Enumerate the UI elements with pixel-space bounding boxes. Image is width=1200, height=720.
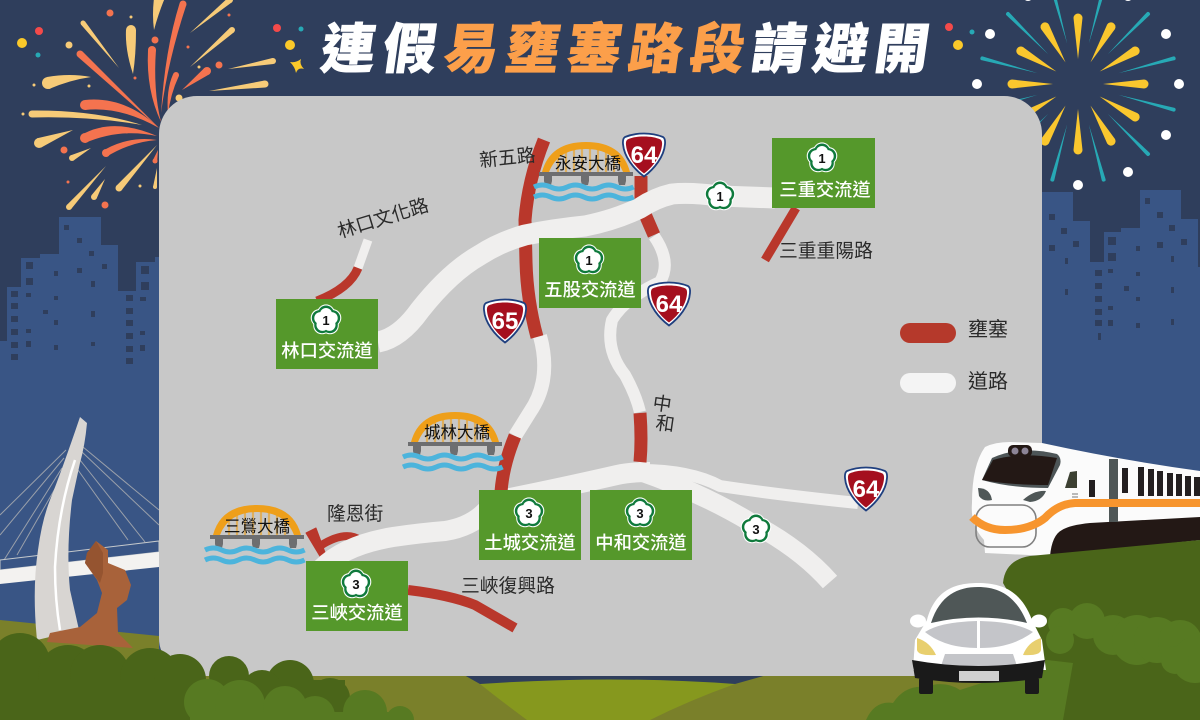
left cable bridge with tower <box>0 417 159 640</box>
sign: tucheng <box>479 490 581 560</box>
title sparkles <box>273 23 974 73</box>
legend <box>900 318 1008 393</box>
bridge: chenglin <box>403 412 503 469</box>
ground <box>0 620 1200 720</box>
title: 連假易壅塞路段請避開 <box>317 20 933 80</box>
left firework <box>17 0 276 210</box>
route shield 65 <box>484 300 526 342</box>
right city skyline <box>1040 190 1200 720</box>
legend: 壅塞 <box>968 318 1008 341</box>
congestion: linkou culture road <box>317 268 358 301</box>
bridge: yongan <box>534 142 634 199</box>
map panel <box>159 96 1042 676</box>
road: freeway 1 main <box>378 193 775 342</box>
sign: sanxia <box>306 561 408 631</box>
road labels: 隆恩街 <box>327 503 384 524</box>
sign: zhonghe <box>590 490 692 560</box>
freeway marker 3 <box>741 513 771 543</box>
road map <box>306 140 858 628</box>
sign: linkou: 林口交流道 <box>281 340 373 361</box>
route shield 64 middle: 64 <box>656 291 683 318</box>
congestion: sanxia fuxing road <box>408 590 515 628</box>
legend: 道路 <box>968 370 1008 393</box>
road labels: 林口文化路 <box>335 194 431 242</box>
route shield 64 north: 64 <box>631 142 658 169</box>
right bushes <box>866 540 1200 720</box>
left bushes <box>0 633 414 720</box>
sign: sanxia: 3 <box>352 577 360 592</box>
sign: sanchong <box>772 138 875 208</box>
bridge: chenglin: 城林大橋 <box>424 423 490 442</box>
congestion: long-en street <box>306 528 360 558</box>
sign: wugu: 五股交流道 <box>544 279 636 300</box>
car <box>910 583 1047 694</box>
sign: sanchong: 三重交流道 <box>779 179 871 200</box>
route shield 64 north <box>623 134 665 176</box>
congestion: route 64 north <box>641 176 654 235</box>
congestion: route 65 south <box>501 436 515 492</box>
sign: tucheng: 3 <box>525 506 533 521</box>
road: freeway 3 main <box>322 472 650 568</box>
sign: wugu: 1 <box>585 253 593 268</box>
freeway marker 1 <box>705 180 735 210</box>
train <box>972 442 1200 556</box>
road: freeway 3 south branch <box>636 470 830 582</box>
sign: sanxia: 三峽交流道 <box>311 602 403 623</box>
sign: zhonghe: 3 <box>636 506 644 521</box>
road labels: 三重重陽路 <box>779 240 873 261</box>
freeway marker 3: 3 <box>752 522 760 537</box>
road labels <box>327 144 873 596</box>
route shield 64 east: 64 <box>853 476 880 503</box>
road labels: 和 <box>654 412 676 436</box>
sign: wugu <box>539 238 641 308</box>
road labels: 新五路 <box>478 144 537 171</box>
road: route 65 white <box>515 336 544 436</box>
queen's head rock <box>47 541 133 648</box>
sign: linkou: 1 <box>322 313 330 328</box>
road: route 64 white <box>610 236 665 412</box>
route shield 64 east <box>845 468 887 510</box>
sign: tucheng: 土城交流道 <box>484 532 576 553</box>
freeway marker 1: 1 <box>716 189 724 204</box>
sign: linkou <box>276 299 378 369</box>
right firework <box>972 0 1184 190</box>
route shield 65: 65 <box>492 308 518 335</box>
bridge: sanying: 三鶯大橋 <box>224 517 290 536</box>
road labels: 中 <box>651 392 673 416</box>
road: route 64 east branch <box>640 470 858 503</box>
route shield 64 middle <box>648 282 690 326</box>
road labels: 三峽復興路 <box>461 575 555 596</box>
bridge: sanying <box>205 505 305 562</box>
sign: zhonghe: 中和交流道 <box>595 532 687 553</box>
bridge: yongan: 永安大橋 <box>555 154 622 173</box>
left city skyline <box>0 217 160 720</box>
congestion: chongyang road <box>765 208 796 260</box>
congestion: zhonghe <box>640 413 641 462</box>
road: linkou culture white <box>358 240 368 268</box>
congestion: xinwu road <box>525 140 544 337</box>
sign: sanchong: 1 <box>818 151 826 166</box>
